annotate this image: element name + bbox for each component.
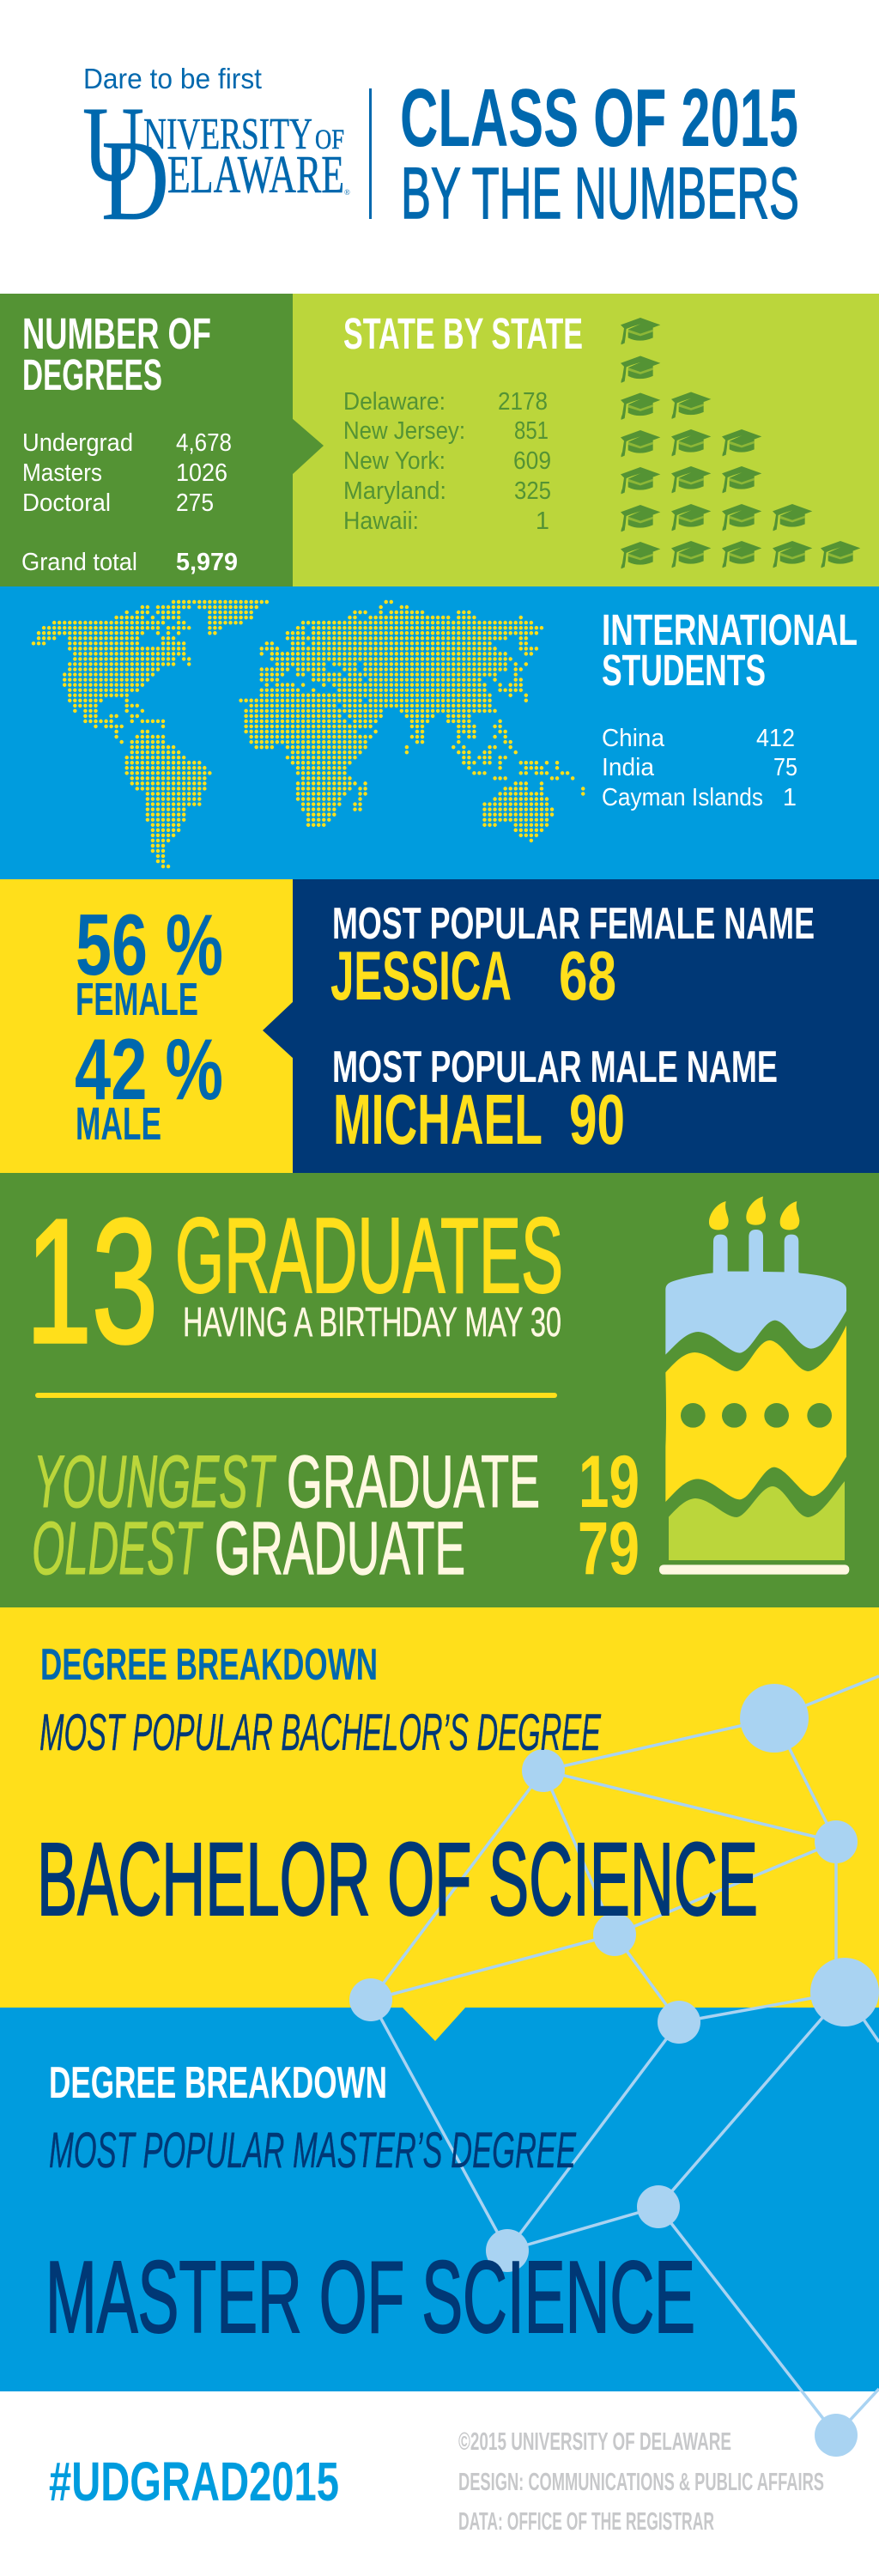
degrees text: 1026 [176,459,227,487]
heading: degree breakdown: DEGREE BREAKDOWN [40,1640,378,1690]
degrees text: 4,678 [176,429,232,457]
logo: University of Delaware: ELAWARE [167,146,344,204]
international students text: 412 [756,725,795,752]
logo: University of Delaware: D [101,117,169,244]
state text: 1 [536,507,549,535]
degrees text: 5,979 [176,549,238,576]
panel: birthdays and ages: GRADUATE [287,1441,540,1523]
international students text: STUDENTS [602,646,766,695]
degrees text: DEGREES [22,350,162,399]
panel: birthdays and ages: 79 [578,1507,640,1590]
credits: ©2015 UNIVERSITY OF DELAWARE [458,2428,731,2456]
international students text: India [602,754,655,781]
panel: birthdays and ages: GRADUATE [215,1507,465,1590]
degrees text: Masters [22,459,102,487]
logo: University of Delaware: NIVERSITY [143,110,312,159]
header divider [369,88,372,219]
logo: University of Delaware [82,86,350,244]
panel: master degree background [0,2007,879,2391]
label female: FEMALE [76,974,198,1025]
arrow [292,418,324,475]
international students text: Cayman Islands [602,784,763,811]
credits: DATA: OFFICE OF THE REGISTRAR [458,2508,714,2536]
label male: MALE [76,1098,161,1150]
degrees text: 275 [176,489,214,517]
youngest graduate: YOUNGEST [33,1441,276,1523]
panel: gender split [0,879,293,1173]
international students text: 75 [773,754,797,781]
state text: New Jersey: [343,417,465,445]
state text: 851 [514,417,549,445]
degrees text [21,309,238,576]
panel: bachelor degree background [0,1607,879,2008]
panel: birthdays and ages: 19 [579,1441,640,1523]
male name: MICHAEL [333,1079,543,1159]
international students text [602,605,858,811]
bachelor degree text [37,1640,758,1937]
panel: popular names [263,879,879,1173]
heading: number of degrees: NUMBER OF [22,309,211,358]
network graphic [349,1676,879,2457]
state text: Maryland: [343,477,446,505]
arrow [263,1001,294,1059]
state text: 325 [514,477,551,505]
degrees text: Doctoral [22,489,111,517]
panel: state by state [293,294,879,586]
icon: graduation caps pictogram [621,318,860,568]
percent male: 42 % [75,1022,223,1118]
degree counts: Undergrad [22,429,133,457]
panel: international students [0,586,879,879]
percent female: 56 % [76,897,223,993]
panel: number of degrees [0,294,324,586]
female name: JESSICA [330,938,512,1015]
world map dot grid [33,602,583,866]
panel: header [82,63,799,244]
heading: state by state: STATE BY STATE [343,309,583,358]
logo: University of Delaware: OF [315,125,344,155]
state counts: Delaware: [343,388,446,416]
state text [343,309,583,535]
hashtag: #UDGRAD2015 [49,2451,339,2512]
divider rule [35,1393,557,1398]
panel: popular names: 90 [569,1079,625,1159]
degrees text: Grand total [21,549,137,576]
oldest graduate: OLDEST [32,1507,203,1590]
state text: Hawaii: [343,507,419,535]
country counts: China [602,725,665,752]
international students text: 1 [783,784,797,811]
state text: 609 [513,447,551,475]
footer [49,2428,824,2536]
graduates: GRADUATES [175,1197,563,1315]
panel: birthdays and ages [0,1173,879,1607]
logo: University of Delaware: ® [344,188,350,197]
heading: degree breakdown: DEGREE BREAKDOWN [49,2058,387,2108]
icon: birthday cake [659,1196,849,1575]
logo tagline: Dare to be first [83,63,262,94]
master degree text [45,2058,695,2354]
number 13: 13 [26,1182,158,1380]
logo: University of Delaware: U [82,86,144,204]
panel: popular names: 68 [559,938,616,1015]
state text: New York: [343,447,446,475]
birthday caption: HAVING A BIRTHDAY MAY 30 [183,1300,561,1346]
credits [458,2428,824,2536]
state text: 2178 [498,388,548,416]
